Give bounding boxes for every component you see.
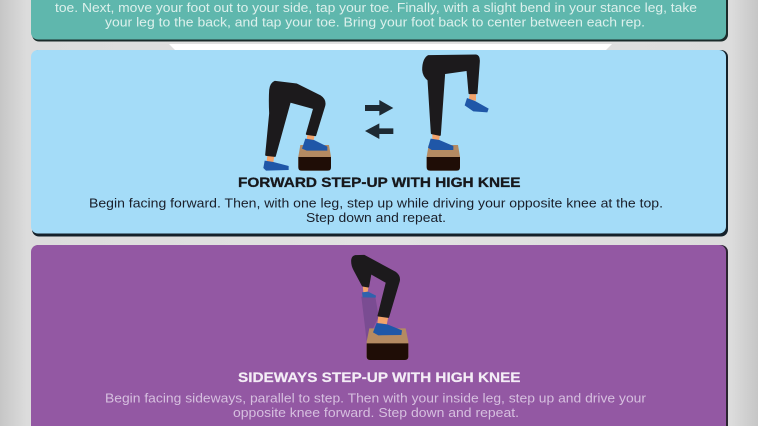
text: sideways step-up instructions: opposite knee forward. Step down and repeat.	[233, 406, 519, 420]
panel: teal exercise card	[31, 0, 728, 42]
text: sideways step-up instructions: Begin facing sideways, parallel to step. Then with your inside leg, step up and drive your	[105, 392, 646, 406]
heading: sideways step-up: SIDEWAYS STEP-UP WITH HIGH KNEE	[238, 369, 520, 385]
text: forward step-up instructions: Step down and repeat.	[306, 211, 446, 225]
panel: sideways step-up	[31, 245, 728, 426]
shadow of standing leg	[361, 297, 379, 341]
text: teal card instructions: toe. Next, move your foot out to your side, tap your toe. Finally, with a slight bend in your stance leg, take	[55, 1, 697, 15]
icon: arrow right	[365, 100, 393, 116]
icon: starting pose figure	[263, 82, 331, 171]
box	[367, 328, 408, 360]
text: sideways step-up instructions	[105, 392, 646, 420]
legs	[352, 256, 399, 317]
icon: high knee pose figure	[423, 55, 489, 171]
heading: forward step-up: FORWARD STEP-UP WITH HIGH KNEE	[238, 174, 520, 190]
connector tab between cards	[169, 44, 612, 50]
text: forward step-up instructions: Begin facing forward. Then, with one leg, step up while driving your opposite knee at the top.	[89, 196, 663, 210]
skin details	[363, 285, 388, 325]
text: forward step-up instructions	[89, 196, 663, 225]
illustration: forward step-up sequence	[263, 55, 489, 171]
text: teal card instructions: your leg to the back, and tap your toe. Bring your foot back to center between each rep.	[105, 16, 645, 30]
text: teal card instructions	[55, 1, 697, 30]
illustration: sideways step-up figure	[352, 256, 408, 360]
icon: arrow left	[365, 123, 393, 139]
shoes	[362, 292, 376, 298]
panel: forward step-up	[31, 50, 728, 236]
